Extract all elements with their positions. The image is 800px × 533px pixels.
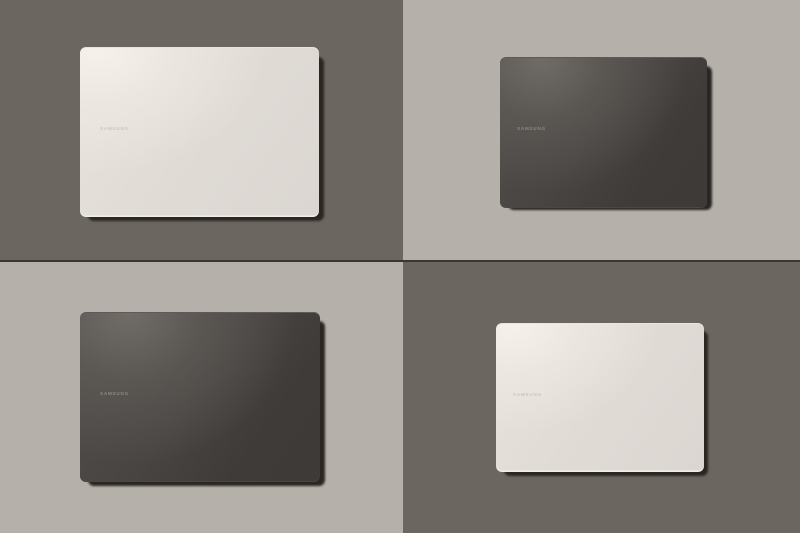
laptop: bottom-left graphite <box>80 312 320 482</box>
panel: top-right light background <box>403 0 800 260</box>
laptop shadow: top-right <box>508 66 712 210</box>
laptop: top-left cream <box>80 47 319 217</box>
logo text: SAMSUNG <box>100 126 129 131</box>
laptop shadow: bottom-left <box>88 321 325 486</box>
laptop: top-right graphite <box>500 57 707 208</box>
divider: horizontal dark seam <box>0 260 800 262</box>
panel: bottom-right dark background <box>403 260 800 533</box>
panel: top-left dark background <box>0 0 403 261</box>
logo text: SAMSUNG <box>517 126 546 131</box>
logo text: SAMSUNG <box>100 391 129 396</box>
laptop shadow: bottom-right <box>504 331 708 476</box>
logo text: SAMSUNG <box>513 392 542 397</box>
laptop: bottom-right cream <box>496 323 704 472</box>
laptop shadow: top-left <box>88 57 324 221</box>
panel: bottom-left light background <box>0 262 403 533</box>
